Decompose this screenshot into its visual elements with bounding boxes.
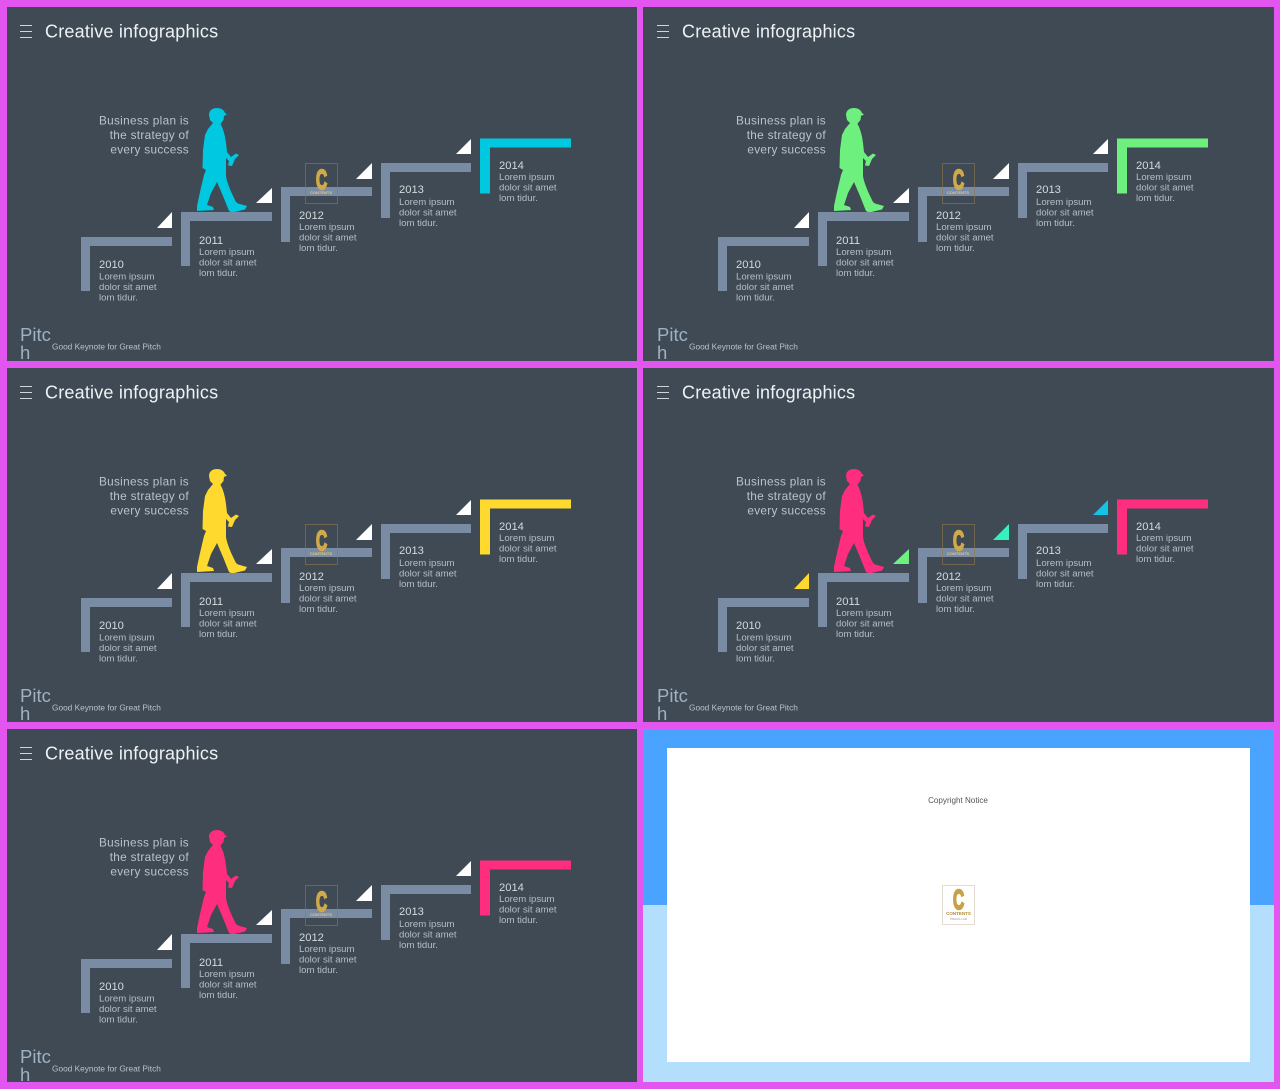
step 2011: dolor sit amet [199,980,257,990]
step 2014: dolor sit amet [499,544,557,554]
icon: walking worker silhouette [197,469,247,574]
step 2010 [718,573,809,664]
title: Creative infographics [45,382,218,402]
text block: tagline: the strategy of [110,489,189,503]
icon: walking worker silhouette [834,108,884,212]
footer brand: Pitc [20,685,51,706]
step 2012: lom tidur. [936,243,975,254]
step 2011: lom tidur. [836,268,875,279]
step 2011: dolor sit amet [836,258,894,268]
step 2014: lom tidur. [499,193,538,204]
panel: copyright notice [643,729,1274,1082]
icon: contents logo [306,164,338,204]
step 2012 [281,163,372,254]
icon: contents logo: C [316,525,327,556]
step 2012 [918,524,1009,615]
title: Creative infographics [682,22,855,42]
step 2011: dolor sit amet [199,618,257,630]
step 2014: dolor sit amet [499,182,557,194]
step 2011: Lorem ipsum [199,969,254,980]
icon: contents logo: C [953,884,964,915]
icon: contents logo [306,524,338,564]
icon: contents logo [942,884,974,924]
icon: contents logo [942,164,974,204]
text block: tagline: Business plan is [99,474,189,488]
step 2010: dolor sit amet [99,282,157,293]
step 2014 [1117,500,1208,565]
step 2013: dolor sit amet [1036,208,1094,218]
step 2014: lom tidur. [1136,554,1175,565]
step 2014 [480,860,571,926]
text block: tagline: the strategy of [747,489,826,503]
text block: tagline: every success [110,504,189,518]
step 2011: Lorem ipsum [199,608,254,619]
step 2010: 2010 [99,620,124,632]
step 2011: Lorem ipsum [836,247,891,258]
step 2014: 2014 [499,882,524,894]
footer caption: Good Keynote for Great Pitch [689,702,798,712]
step 2012 [281,885,372,976]
footer caption: Good Keynote for Great Pitch [52,1064,161,1074]
footer caption: Good Keynote for Great Pitch [52,702,161,712]
step 2014: lom tidur. [1136,193,1175,204]
step 2014: 2014 [1136,521,1161,533]
footer brand: h [20,703,30,724]
icon: contents logo: C [953,525,964,556]
icon: menu [20,26,32,38]
step 2010: 2010 [736,259,761,271]
step 2011: Lorem ipsum [836,608,891,619]
panel: green walker slide [643,7,1274,363]
step 2013: Lorem ipsum [399,558,454,569]
step 2013: Lorem ipsum [1036,558,1091,569]
step 2010 [81,934,172,1026]
step 2010 [81,573,172,664]
text block: tagline: Business plan is [99,836,189,850]
text block: tagline: the strategy of [747,128,826,142]
icon: menu [657,26,669,38]
text block: tagline: the strategy of [110,850,189,864]
step 2012: 2012 [936,571,961,583]
step 2011: lom tidur. [199,268,238,279]
step 2013: dolor sit amet [399,568,457,580]
step 2010: dolor sit amet [99,643,157,654]
step 2010: 2010 [99,259,124,271]
step 2010: lom tidur. [736,654,775,664]
step 2011 [181,549,272,640]
icon: contents logo: C [316,886,327,917]
step 2010: 2010 [736,620,761,632]
text block: tagline: every success [110,864,189,878]
text block: tagline: the strategy of [110,128,189,142]
step 2013 [1018,500,1108,590]
step 2013: lom tidur. [399,218,438,229]
step 2011: 2011 [836,596,860,608]
step 2013: 2013 [399,906,424,918]
step 2011 [181,188,272,279]
footer brand: Pitc [657,685,688,706]
step 2012: lom tidur. [936,604,975,615]
step 2013: dolor sit amet [1036,568,1094,580]
step 2013: lom tidur. [1036,579,1075,590]
step 2013: Lorem ipsum [399,197,454,208]
step 2011 [181,910,272,1001]
icon: walking worker silhouette [197,830,247,934]
text block: tagline: every success [747,142,826,156]
step 2010: Lorem ipsum [99,994,154,1004]
step 2011: 2011 [199,596,223,608]
step 2011: lom tidur. [199,629,238,640]
step 2010: lom tidur. [99,1014,138,1026]
icon: walking worker silhouette [197,108,247,212]
step 2012: Lorem ipsum [936,222,991,233]
footer caption: Good Keynote for Great Pitch [52,342,161,352]
step 2013: 2013 [1036,184,1061,196]
step 2014: 2014 [499,521,524,533]
step 2012: dolor sit amet [936,232,994,244]
step 2013: lom tidur. [399,579,438,590]
step 2012: 2012 [936,210,961,222]
step 2014: Lorem ipsum [1136,533,1191,544]
icon: contents logo: C [953,164,964,195]
step 2010: Lorem ipsum [736,632,791,644]
step 2014: Lorem ipsum [499,894,554,905]
title: Creative infographics [45,744,218,764]
step 2012: lom tidur. [299,604,338,615]
icon: contents logo [942,524,974,564]
title: Creative infographics [45,22,218,42]
text block: tagline: Business plan is [736,474,826,488]
step 2014: 2014 [1136,160,1161,172]
step 2014 [480,138,571,204]
step 2014: dolor sit amet [499,904,557,916]
step 2012: lom tidur. [299,243,338,254]
step 2012: 2012 [299,932,324,944]
text block: tagline: every success [747,504,826,518]
step 2011: dolor sit amet [836,618,894,630]
step 2012: Lorem ipsum [299,944,354,955]
step 2012: dolor sit amet [299,954,357,966]
panel: pink walker slide with coloured triangles [643,368,1274,724]
step 2010: lom tidur. [99,654,138,664]
step 2010: Lorem ipsum [99,632,154,644]
panel: yellow walker slide [7,368,637,724]
step 2013 [381,500,471,590]
panel: pink walker slide [7,729,637,1085]
step 2010: dolor sit amet [99,1004,157,1015]
step 2014: lom tidur. [499,554,538,565]
step 2010: Lorem ipsum [99,272,154,282]
step 2011 [818,549,909,640]
step 2014: Lorem ipsum [1136,172,1191,183]
title: Creative infographics [682,382,855,402]
step 2012: Lorem ipsum [299,583,354,594]
step 2013: Lorem ipsum [399,919,454,930]
footer brand: Pitc [20,1046,51,1067]
step 2012: 2012 [299,210,324,222]
step 2010: dolor sit amet [736,282,794,293]
icon: walking worker silhouette [834,469,884,574]
step 2014: Lorem ipsum [499,172,554,183]
step 2012: lom tidur. [299,965,338,976]
footer brand: Pitc [20,324,51,345]
step 2013: dolor sit amet [399,208,457,218]
step 2013 [1018,139,1108,229]
step 2014: 2014 [499,160,524,172]
icon: contents logo: C [316,164,327,195]
step 2014 [1117,138,1208,204]
step 2013 [381,861,471,951]
step 2011: dolor sit amet [199,258,257,268]
step 2013: lom tidur. [1036,218,1075,229]
step 2012: dolor sit amet [936,594,994,604]
icon: menu [657,386,669,398]
step 2010 [718,212,809,304]
step 2013: 2013 [1036,545,1061,557]
step 2012: Lorem ipsum [299,222,354,233]
icon: contents logo: CONTENTS [947,551,969,556]
step 2010: 2010 [99,981,124,993]
icon: contents logo: PRESS LAB [950,917,967,921]
footer caption: Good Keynote for Great Pitch [689,342,798,352]
step 2011: lom tidur. [199,990,238,1001]
step 2011: 2011 [199,235,223,247]
footer brand: h [20,1064,30,1085]
text block: tagline: Business plan is [736,114,826,128]
icon: menu [20,386,32,398]
step 2012: Lorem ipsum [936,583,991,594]
step 2012: 2012 [299,571,324,583]
step 2014: dolor sit amet [1136,544,1194,554]
step 2010: lom tidur. [736,292,775,304]
step 2011: 2011 [836,235,860,247]
panel: cyan walker slide [7,7,637,363]
step 2012: dolor sit amet [299,594,357,604]
step 2013: 2013 [399,184,424,196]
step 2013 [381,139,471,229]
icon: contents logo: CONTENTS [310,190,332,195]
icon: contents logo: CONTENTS [947,190,969,195]
step 2010 [81,212,172,304]
step 2010: dolor sit amet [736,643,794,654]
step 2012 [281,524,372,615]
text block: tagline: every success [110,142,189,156]
step 2011: lom tidur. [836,629,875,640]
step 2014: lom tidur. [499,915,538,926]
step 2014 [480,500,571,565]
step 2010: Lorem ipsum [736,272,791,282]
step 2013: lom tidur. [399,940,438,951]
step 2011: Lorem ipsum [199,247,254,258]
footer brand: h [657,703,667,724]
icon: contents logo: CONTENTS [310,912,332,917]
icon: contents logo [306,886,338,926]
step 2011 [818,188,909,279]
icon: contents logo: CONTENTS [310,551,332,556]
step 2014: dolor sit amet [1136,182,1194,194]
step 2010: lom tidur. [99,292,138,304]
step 2013: Lorem ipsum [1036,197,1091,208]
footer brand: h [657,342,667,363]
footer brand: h [20,342,30,363]
step 2012 [918,163,1009,254]
footer brand: Pitc [657,324,688,345]
text block: tagline: Business plan is [99,114,189,128]
step 2013: dolor sit amet [399,930,457,940]
icon: menu [20,748,32,760]
step 2013: 2013 [399,545,424,557]
heading: copyright notice: Copyright Notice [928,796,988,805]
step 2011: 2011 [199,957,223,969]
step 2014: Lorem ipsum [499,533,554,544]
icon: contents logo: CONTENTS [946,911,971,916]
step 2012: dolor sit amet [299,232,357,244]
